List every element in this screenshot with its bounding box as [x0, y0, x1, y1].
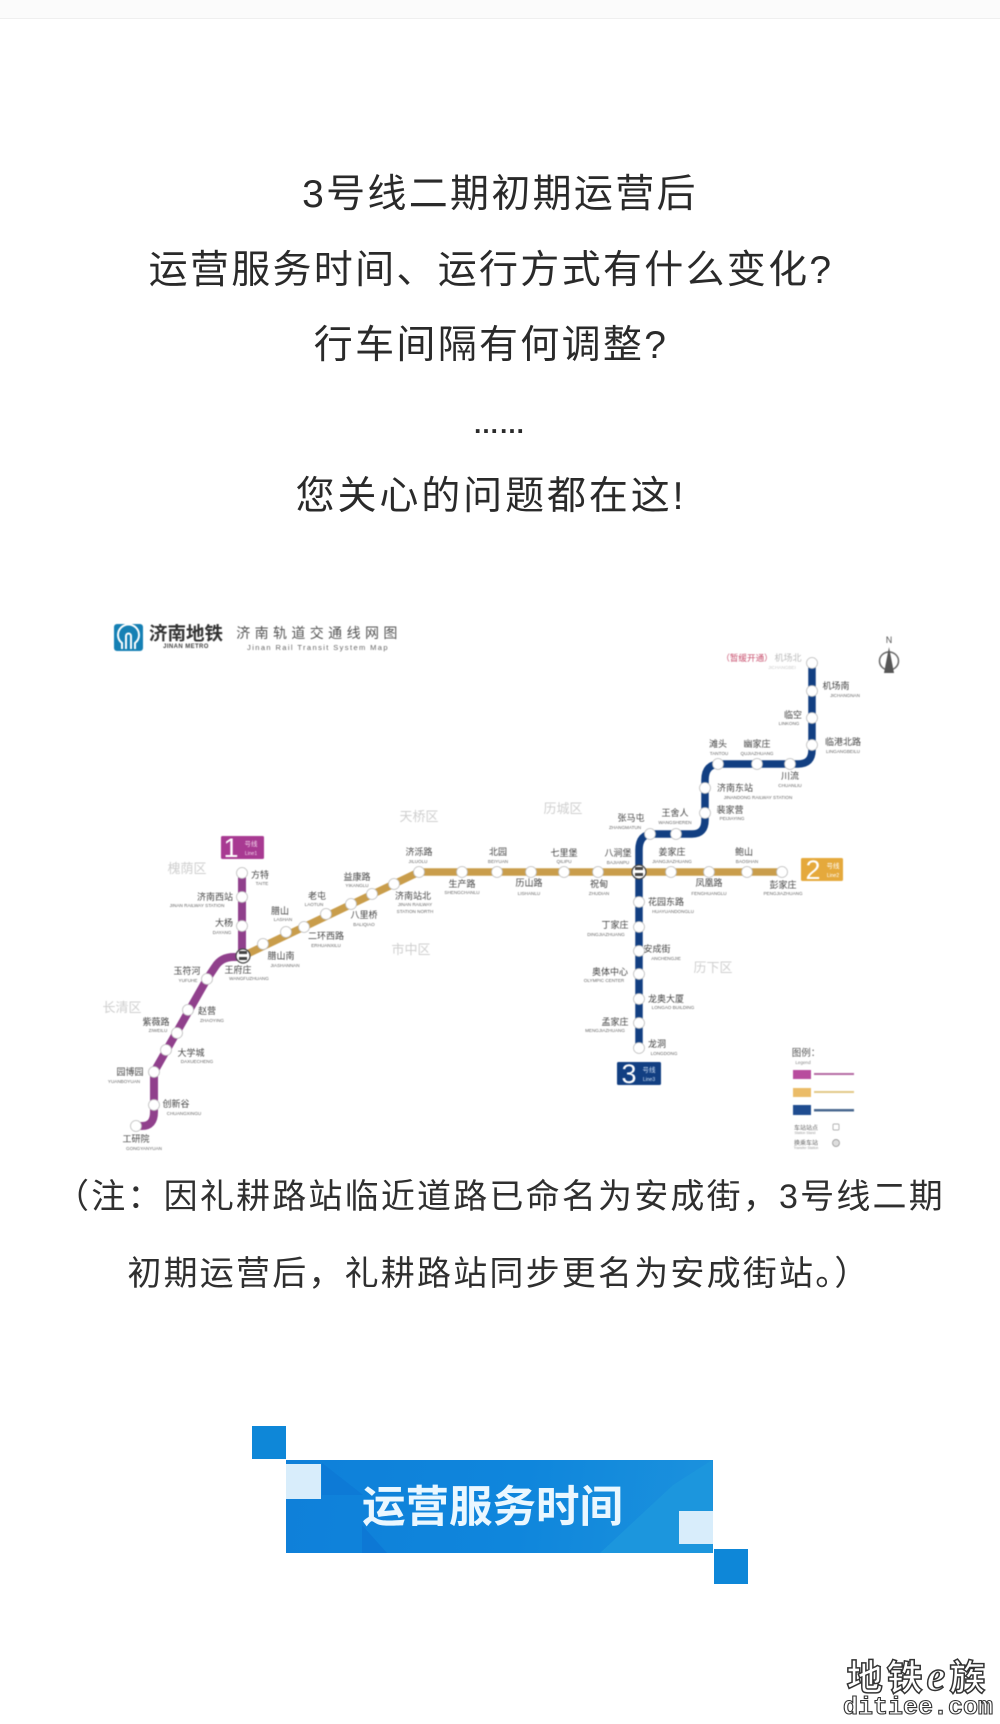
legend: [792, 1047, 854, 1150]
line 3 stations: 临空: [784, 709, 802, 720]
line 2 stations: 二环西路: [308, 930, 344, 941]
line 3 stations: 龙奥大厦: [648, 993, 684, 1004]
line 2 stations: 八里桥: [350, 909, 378, 920]
legend: transfer symbol: 换乘车站: [794, 1139, 818, 1147]
bar shade: lower triangle: [362, 1526, 386, 1553]
line 3 stations: ZHANGMATUN: [609, 825, 641, 830]
ellipsis: ……: [473, 409, 525, 439]
line 2 badge: 号线: [826, 861, 840, 870]
note line 2: 初期运营后，礼耕路站同步更名为安成街站。）: [127, 1255, 871, 1293]
legend: transfer symbol: [794, 1139, 840, 1150]
line 2 stations: 历山路: [515, 877, 543, 888]
line 1 stations: [108, 868, 269, 1151]
line 2 stations: LASHAN: [274, 917, 292, 922]
line 3 stations: JICHANGNAN: [830, 693, 860, 698]
logo english: JINAN METRO: [163, 644, 209, 650]
banner title: 运营服务时间: [362, 1484, 623, 1532]
line 2 stations: 姜家庄: [658, 846, 686, 857]
map header: [114, 623, 402, 652]
legend: line 2: [793, 1088, 854, 1097]
line 2 stations: QILIPU: [556, 859, 572, 864]
district labels: 长清区: [102, 1000, 142, 1015]
line 2 stations: 生产路: [448, 878, 476, 889]
line 1 badge: Line1: [245, 851, 257, 857]
line 3 stations: 临港北路: [825, 736, 861, 747]
line 3 stations: 龙洞: [648, 1038, 666, 1049]
line 3 stations: 机场南: [822, 680, 850, 691]
line 1 stations: 赵营: [198, 1005, 216, 1016]
line 1 stations: GONGYANYUAN: [126, 1146, 162, 1151]
legend: Legend: [795, 1060, 811, 1065]
square: top-left light: [286, 1464, 321, 1499]
line 2 stations: YIKANGLU: [345, 883, 369, 888]
line 1 stations: 玉符河: [173, 965, 201, 976]
map title: 济南轨道交通线网图: [236, 625, 402, 641]
callout: deferred opening: （暂缓开通）: [721, 652, 773, 663]
line 2 stations: 老屯: [308, 890, 326, 901]
line 3 stations: QUJIAZHUANG: [741, 751, 774, 756]
line 1 stations: DAYANG: [213, 930, 232, 935]
line 1 stations: TAITE: [256, 881, 268, 886]
logo wordmark: 济南地铁: [149, 623, 223, 644]
line 2 badge: Line2: [827, 873, 839, 879]
line 2 stations: LISHANLU: [518, 891, 540, 896]
line 2 stations: 益康路: [343, 871, 371, 882]
line 1 badge: 号线: [244, 839, 258, 848]
line 3 badge: 号线: [642, 1065, 656, 1074]
district labels: 历城区: [543, 801, 583, 816]
line 2 stations: ZHUDIAN: [589, 891, 609, 896]
line 3 stations: JICHANGBEI: [768, 665, 796, 670]
district labels: 历下区: [693, 960, 733, 975]
icon: north compass: N: [886, 635, 892, 645]
line 2 stations: [258, 846, 803, 968]
metro network map: [102, 623, 900, 1151]
line 2 stations: 祝甸: [590, 878, 608, 889]
line 3 stations: TANTOU: [710, 751, 728, 756]
line 2 stations: 济泺路: [405, 846, 433, 857]
line 1 badge: 1: [223, 833, 239, 863]
line 2 badge: 2: [805, 855, 821, 885]
line 1 stations: 方特: [251, 869, 269, 880]
line 1 stations: JINAN RAILWAY STATION: [170, 903, 224, 908]
line 2 stations: 北园: [489, 847, 507, 857]
line 3 stations: JINANDONG RAILWAY STATION: [724, 795, 792, 800]
line 3 stations: DINGJIAZHUANG: [587, 932, 625, 937]
line 3 stations: HUAYUANDONGLU: [652, 909, 694, 914]
line 2 stations: SHENGCHANLU: [444, 890, 480, 895]
line 1 stations: YUANBOYUAN: [108, 1079, 140, 1084]
legend: line 3: [793, 1105, 854, 1115]
note text block: [55, 1178, 945, 1293]
line 2 stations: JIANGJIAZHUANG: [652, 859, 692, 864]
line 2 stations: LAOTUN: [305, 902, 323, 907]
line 2 stations: 济南站北: [395, 890, 431, 901]
legend: transfer symbol: Transfer Station: [794, 1146, 818, 1150]
line 2 stations: 凤凰路: [695, 877, 723, 888]
square: right light: [679, 1511, 713, 1544]
line 3 stations: 幽家庄: [743, 738, 771, 749]
line 2 stations: BEIYUAN: [488, 859, 508, 864]
district labels: 天桥区: [399, 809, 439, 824]
line 1 badge: [221, 833, 264, 863]
line 1 stations: 工研院: [122, 1133, 150, 1144]
district labels: [102, 801, 733, 1015]
line 1 stations: ZHAOYING: [200, 1018, 224, 1023]
line 3 stations: 安成街: [643, 943, 671, 954]
district labels: 槐荫区: [167, 861, 207, 876]
line 3 stations: LINKONG: [779, 721, 800, 726]
legend: station symbol: Station Stand: [794, 1131, 816, 1135]
icon: north compass: [880, 635, 898, 673]
section banner: [252, 1426, 748, 1584]
line 3 stations: CHUANLIU: [778, 783, 802, 788]
line 3 stations: 奥体中心: [592, 966, 628, 977]
interchange: 八涧堡: 八涧堡: [604, 847, 632, 858]
line 3 stations: ANCHENGJIE: [651, 956, 681, 961]
line 1 stations: DAXUECHENG: [181, 1059, 214, 1064]
line 3 stations: 裴家营: [716, 804, 744, 815]
line 2 stations: 鲍山: [735, 846, 753, 857]
interchange: 王府庄: WANGFUZHUANG: [229, 976, 269, 981]
line 1 stations: ZIWEILU: [149, 1028, 167, 1033]
line 3 stations: WANGSHEREN: [658, 820, 692, 825]
line 3 stations: LONGDONG: [651, 1051, 678, 1056]
line 3 stations: 济南东站: [717, 782, 753, 793]
line 3: [584, 652, 861, 1089]
line 1 stations: 紫薇路: [142, 1016, 170, 1027]
district labels: 市中区: [391, 942, 431, 957]
top status strip: [0, 0, 1000, 19]
line 3 stations: 花园东路: [648, 896, 684, 907]
map title english: Jinan Rail Transit System Map: [247, 643, 389, 652]
line 3 stations: 川流: [781, 770, 799, 781]
square: top-left dark: [252, 1426, 286, 1459]
line 3 stations: 滩头: [709, 738, 727, 749]
line 2: [243, 846, 843, 968]
legend: station symbol: [794, 1124, 839, 1135]
line 3 stations: PEIJIAYING: [720, 816, 745, 821]
line 2 stations: 七里堡: [550, 847, 578, 858]
line 3 stations: LINGANGBEILU: [826, 749, 860, 754]
watermark chinese: 地铁e族: [847, 1650, 989, 1701]
line 1 stations: 园博园: [116, 1066, 144, 1077]
interchange: 王府庄: 王府庄: [224, 964, 252, 975]
line 2 stations: ERHUANXILU: [311, 943, 341, 948]
legend: station symbol: 车站站点: [794, 1124, 818, 1132]
legend: line 1: [793, 1070, 854, 1079]
legend title: 图例：: [792, 1047, 820, 1059]
interchange: 八涧堡: BAJIANPU: [607, 860, 629, 865]
interchange: 八涧堡: [604, 847, 646, 879]
heading line 1: 3号线二期初期运营后: [302, 173, 698, 216]
line 1: [108, 833, 269, 1151]
line 3 stations: 机场北: [774, 652, 802, 663]
line 2 stations: 腊山南: [267, 950, 295, 961]
line 3 stations: [584, 652, 861, 1056]
line 2 stations: FENGHUANGLU: [691, 891, 727, 896]
line 3 stations: 王舍人: [661, 807, 689, 818]
bar shade: upper-left triangle: [286, 1460, 712, 1553]
line 2 stations: STATION NORTH: [397, 909, 433, 914]
line 1 stations: CHUANGXINGU: [167, 1111, 201, 1116]
line 3 stations: LONGAO BUILDING: [652, 1005, 695, 1010]
line 2 stations: BALIQIAO: [353, 922, 375, 927]
line 1 stations: 济南西站: [197, 891, 233, 902]
line 2 stations: 腊山: [271, 906, 289, 916]
line 2 stations: PENGJIAZHUANG: [763, 891, 803, 896]
line 3 stations: 孟家庄: [601, 1016, 629, 1027]
line 2 stations: BAOSHAN: [736, 859, 758, 864]
line 3 badge: 3: [621, 1059, 637, 1089]
line 3 badge: Line3: [643, 1077, 655, 1083]
square: bottom-right dark: [714, 1549, 748, 1584]
line 1 stations: 大杨: [215, 917, 233, 928]
line 2 stations: JILUOLU: [409, 859, 427, 864]
line 2 stations: JIASHANNAN: [270, 963, 300, 968]
line 3 badge: [617, 1059, 661, 1089]
note line 1: （注：因礼耕路站临近道路已命名为安成街，3号线二期: [55, 1178, 945, 1216]
watermark: [843, 1650, 993, 1722]
watermark url: ditiee.com: [843, 1693, 993, 1722]
line 1 stations: YUFUHE: [179, 978, 197, 983]
line 1 stations: 创新谷: [162, 1098, 190, 1109]
heading line 2: 运营服务时间、运行方式有什么变化?: [149, 249, 833, 292]
heading text block: [149, 173, 833, 518]
line 1 track: [136, 873, 242, 1126]
line 3 track: [639, 663, 812, 1048]
line 2 stations: 彭家庄: [769, 879, 797, 890]
line 3 stations: 丁家庄: [601, 919, 629, 930]
line 2 track: [243, 872, 782, 956]
bar highlight: right diagonal: [600, 1505, 654, 1553]
line 3 stations: 张马屯: [617, 812, 645, 823]
line 1 stations: 大学城: [177, 1047, 205, 1058]
icon: Jinan Metro logo: [114, 624, 143, 651]
line 3 stations: OLYMPIC CENTER: [584, 978, 625, 983]
heading line 3: 行车间隔有何调整?: [314, 324, 668, 367]
line 3 stations: MENGJIAZHUANG: [585, 1028, 625, 1033]
line 2 badge: [801, 855, 843, 885]
interchange: 王府庄: [224, 949, 269, 981]
heading line 5: 您关心的问题都在这!: [296, 475, 686, 518]
line 2 stations: JINAN RAILWAY: [398, 902, 432, 907]
banner bar: [286, 1460, 713, 1553]
